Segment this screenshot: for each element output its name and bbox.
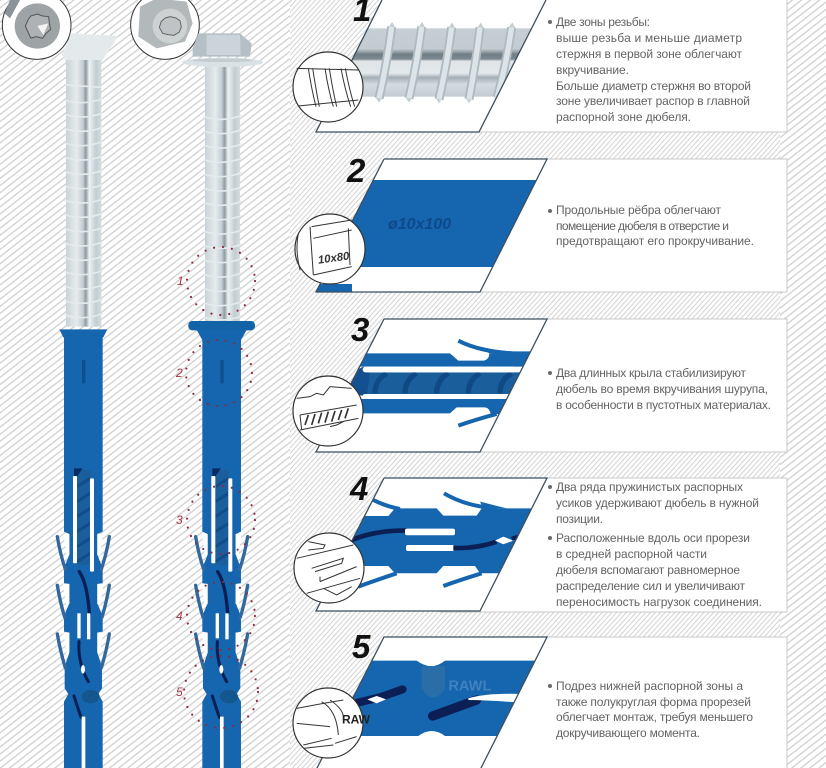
dotted callout 3: 3: [176, 513, 183, 527]
text box 1: [440, 0, 787, 132]
dotted callout 5: 5: [176, 685, 183, 699]
icon: marking line drawing: [295, 214, 365, 284]
screw: countersunk: [62, 33, 118, 327]
text block 5: облегчает монтаж, требуя меньшего: [556, 710, 753, 724]
parallelogram 1: [316, 0, 546, 132]
text block 4: Расположенные вдоль оси прорези: [556, 531, 750, 545]
dotted callout 4: [176, 582, 255, 650]
dotted callout 3: [176, 486, 255, 554]
text block 4: позиции.: [556, 512, 603, 526]
text box 3: [440, 319, 787, 452]
text box 5: [440, 637, 787, 768]
text block 5: также полукруглая форма прорезей: [556, 695, 751, 709]
icon: RAWL line drawing: [293, 688, 371, 758]
text block 1: зоне увеличивает распор в главной: [556, 94, 750, 108]
dotted callout 4: 4: [176, 609, 183, 623]
text block 5: докручивающего момента.: [556, 726, 700, 740]
panel 4: spring whiskers: [294, 470, 787, 612]
text block 3: дюбель во время вкручивания шурупа,: [556, 382, 768, 396]
dotted callout 2: 2: [175, 366, 183, 380]
number 4: 4: [349, 470, 368, 507]
icon: wings line drawing: [293, 376, 363, 446]
dowel: left: [57, 329, 109, 768]
text block 1: стержня в первой зоне облегчают: [556, 47, 742, 61]
number 5: 5: [352, 628, 371, 665]
text block 2: Продольные рёбра облегчают: [556, 203, 722, 217]
parallelogram 3: [316, 319, 547, 452]
number 3: 3: [351, 311, 369, 348]
parallelogram 4: [316, 478, 547, 611]
parallelogram 5: [316, 637, 547, 768]
number 2: 2: [346, 152, 366, 189]
icon: RAWL line drawing: RAW: [342, 712, 371, 726]
icon: thread line drawing: [293, 52, 363, 122]
text block 4: усиков удерживают дюбель в нужной: [556, 496, 759, 510]
panel 2: longitudinal ribs: [295, 152, 787, 294]
icon: countersunk screw head detail: [2, 0, 71, 59]
text block 1: Больше диаметр стержня во второй: [556, 79, 751, 93]
text block 1: [548, 15, 751, 124]
text block 2: помещение дюбеля в отверстие и: [556, 219, 729, 233]
screw: hex head: [182, 33, 263, 334]
parallelogram 2: [310, 159, 550, 294]
text box 2: [440, 159, 787, 292]
icon: marking line drawing: 10x80: [317, 250, 351, 267]
text block 3: [548, 366, 771, 412]
dotted callout 1: [177, 247, 255, 315]
text block 3: Два длинных крыла стабилизируют: [556, 366, 746, 380]
icon: slots line drawing: [294, 533, 364, 603]
dotted callout 5: [176, 656, 258, 728]
text block 2: [548, 203, 754, 248]
text block 1: распорной зоне дюбеля.: [556, 110, 691, 124]
dowel: right: [188, 321, 255, 768]
panel 1: double thread: [293, 0, 787, 132]
text block 1: выше резьба и меньше диаметр: [556, 31, 742, 45]
text box 4: [440, 478, 787, 612]
text block 4: распределение сил и увеличивают: [556, 579, 746, 593]
text block 5: [548, 679, 753, 740]
text block 5: Подрез нижней распорной зоны а: [556, 679, 743, 693]
text block 1: вкручивание.: [556, 63, 629, 77]
dotted callout 1: 1: [177, 274, 184, 288]
text block 4: дюбеля вспомагают равномерное: [556, 563, 740, 577]
text block 4: Два ряда пружинистых распорных: [556, 480, 743, 494]
icon: hex screw head detail: [131, 0, 199, 59]
panel 3: long wings: [293, 311, 787, 452]
text block 3: в особенности в пустотных материалах.: [556, 398, 771, 412]
text block 2: предотвращают его прокручивание.: [556, 234, 754, 248]
parallelogram 5: RAWL: [448, 679, 492, 695]
text block 4: [548, 480, 762, 609]
text block 4: переносимость нагрузок соединения.: [556, 595, 762, 609]
dotted callout 2: [175, 340, 252, 406]
text block 1: Две зоны резьбы:: [556, 15, 650, 29]
panel 5: lower cut: [293, 628, 787, 768]
text block 4: в средней распорной части: [556, 547, 707, 561]
parallelogram 2: ø10x100: [388, 216, 451, 233]
